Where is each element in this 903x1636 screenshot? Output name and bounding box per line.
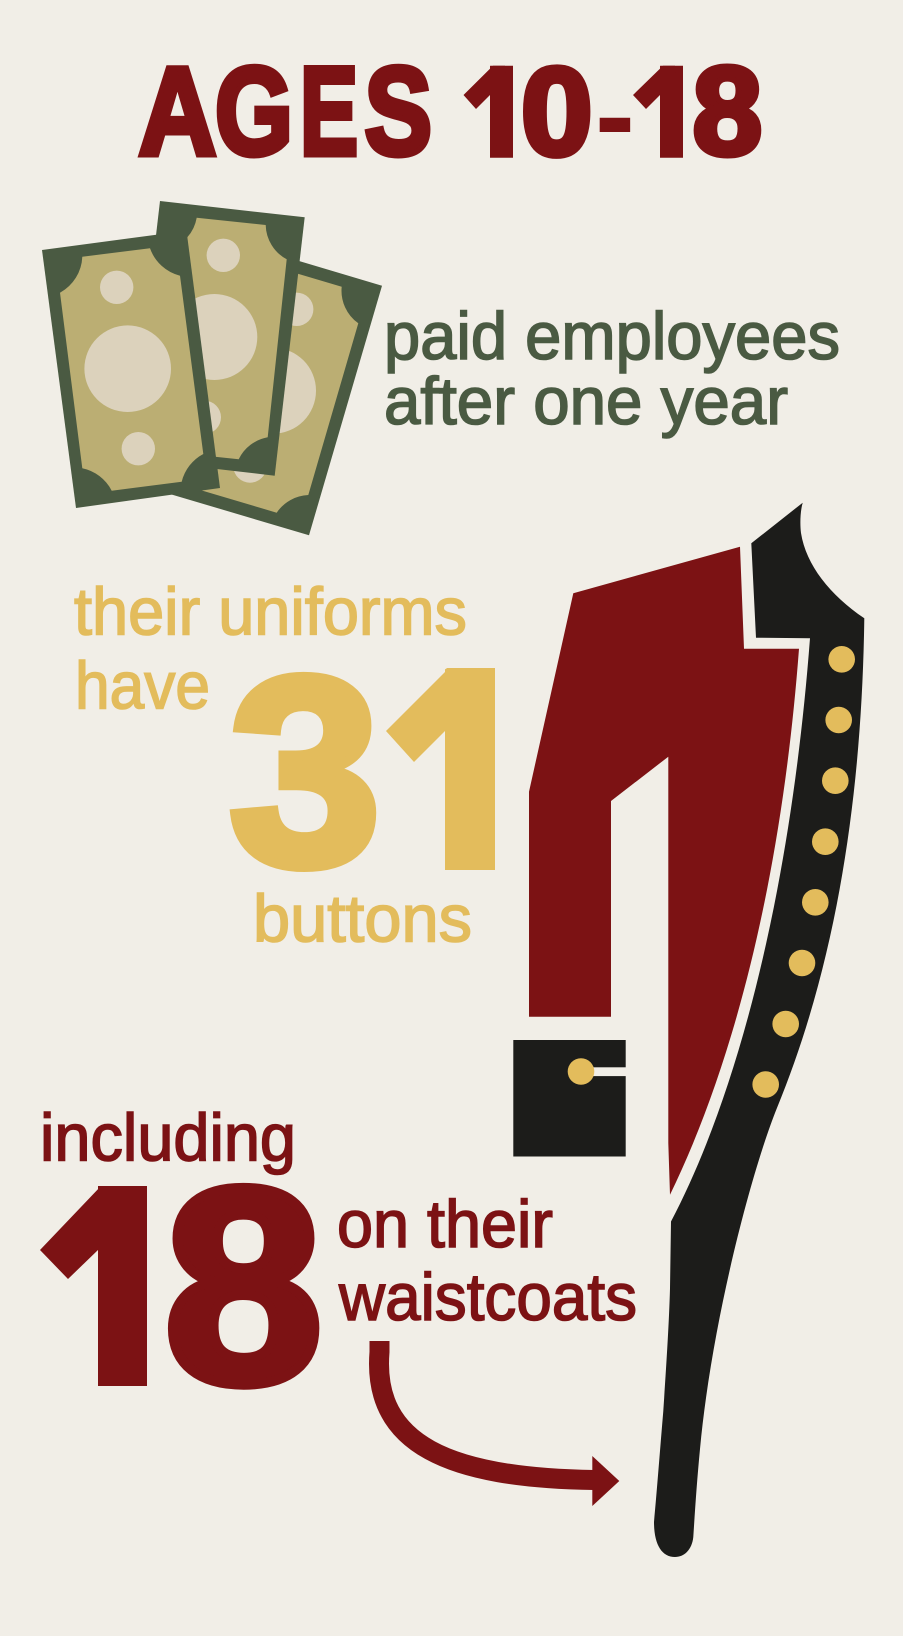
text: their uniforms have 31 buttons: buttons [253, 882, 472, 956]
title: - [595, 48, 635, 182]
text: their uniforms have 31 buttons: their uniforms [74, 575, 467, 650]
title: 1 [464, 43, 533, 182]
title: S [364, 43, 432, 182]
front banknote [42, 231, 220, 508]
text: their uniforms have 31 buttons: 3 [229, 621, 381, 921]
illustration: uniform jacket [513, 503, 864, 1557]
text: including 18 on their waistcoats: waistcoats [338, 1260, 637, 1335]
title: 0 [521, 43, 593, 182]
text: their uniforms have 31 buttons: have [75, 649, 210, 724]
pocket flap with button [513, 1040, 626, 1156]
text: their uniforms have 31 buttons [74, 585, 495, 943]
text: including 18 on their waistcoats: including [40, 1101, 296, 1176]
text: including 18 on their waistcoats [40, 1111, 636, 1390]
arrow to waistcoat [379, 1341, 619, 1506]
text: including 18 on their waistcoats: 8 [164, 1130, 323, 1441]
red waistcoat panel [529, 547, 799, 1195]
title: G [215, 43, 293, 182]
title: A [138, 43, 216, 182]
text: paid employees after one year [384, 299, 840, 439]
middle banknote [130, 201, 305, 476]
back banknote [169, 244, 382, 535]
black coat front [654, 503, 864, 1557]
text: paid employees after one year: after one year [384, 364, 788, 439]
title: 1 [634, 43, 703, 182]
text: including 18 on their waistcoats: on their [337, 1187, 553, 1262]
text: their uniforms have 31 buttons: 1 [385, 613, 541, 925]
text: including 18 on their waistcoats: 1 [38, 1129, 194, 1441]
coat buttons [752, 646, 855, 1098]
title [138, 64, 762, 159]
text: paid employees after one year: paid employees [384, 299, 840, 374]
icon: stack of banknotes [42, 201, 382, 535]
title: 8 [693, 43, 762, 182]
title: E [300, 43, 358, 182]
